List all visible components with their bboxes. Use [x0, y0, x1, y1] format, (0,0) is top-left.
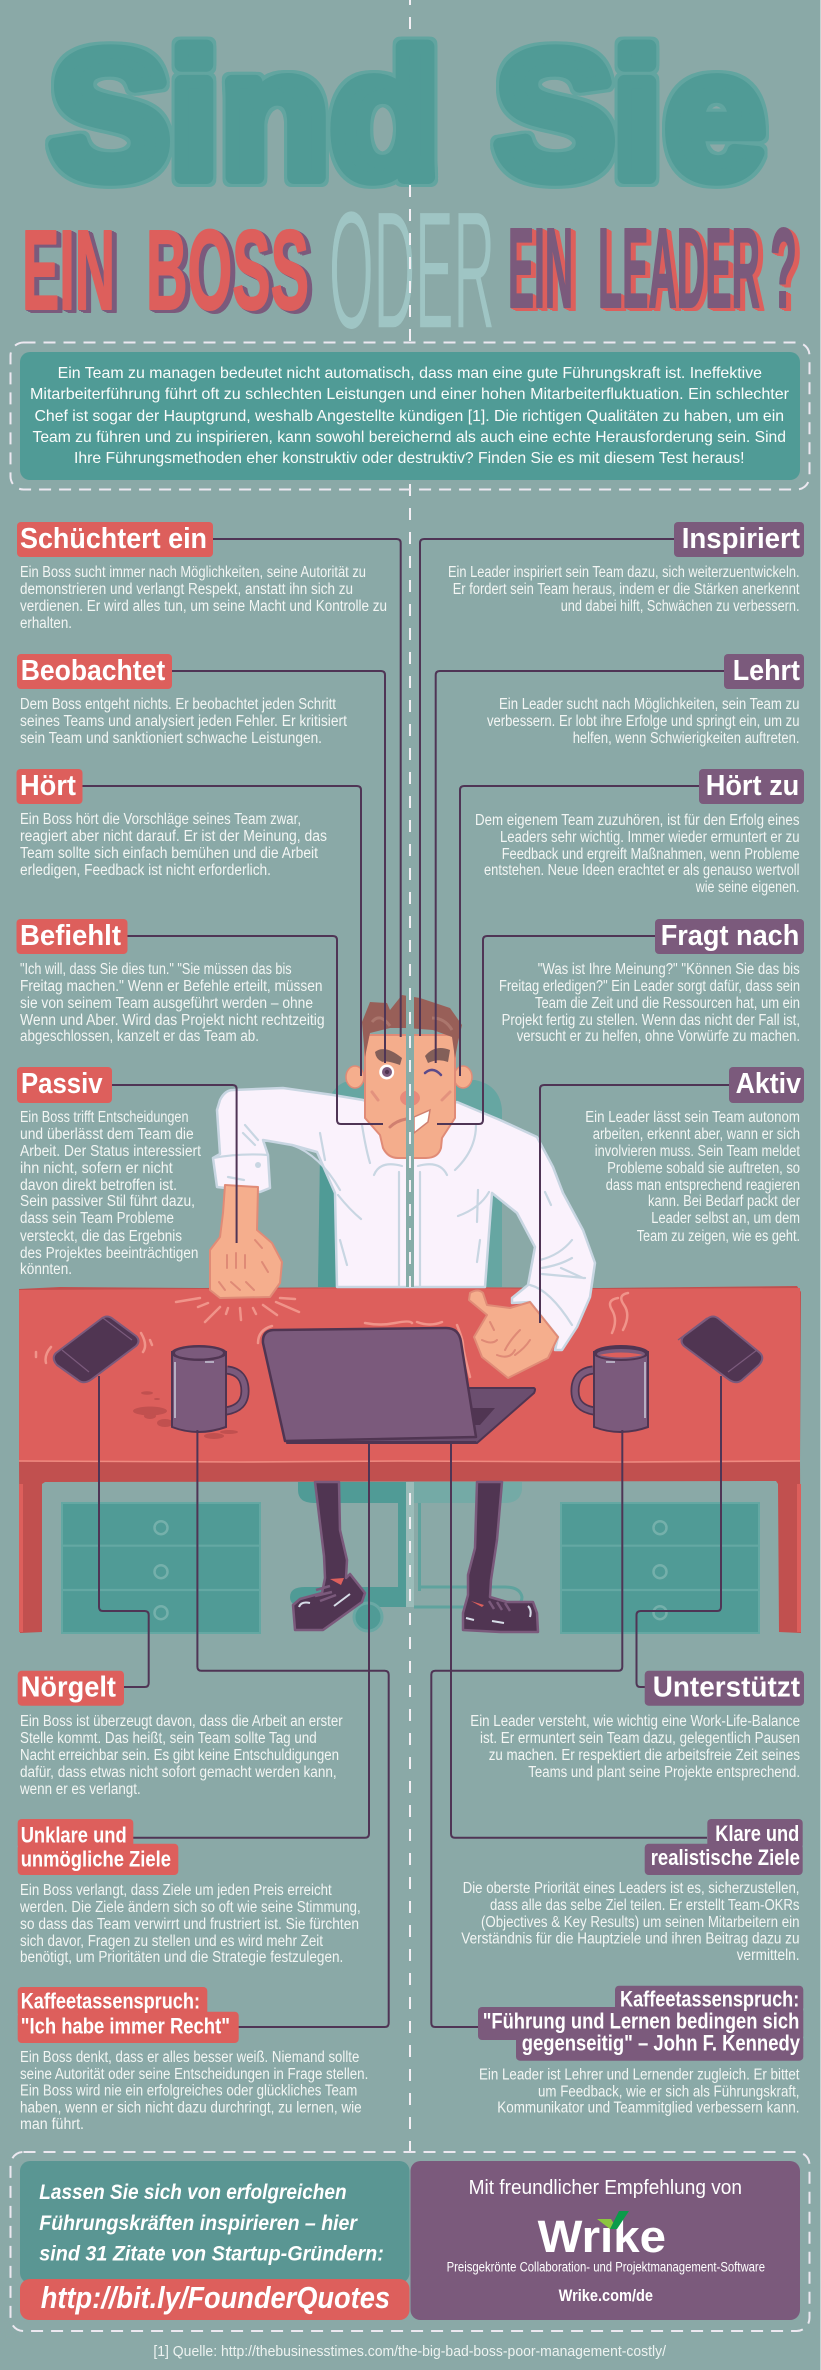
panel: intro: Ein Team zu managen bedeutet nicht automatisch, dass man eine gute Führungskraft ist. Ineffektive	[58, 365, 762, 382]
panel: Hört: erledigen, Feedback ist nicht erforderlich.	[20, 862, 271, 879]
illustration: left leg and shoe	[293, 1482, 365, 1630]
panel: Befiehlt	[16, 919, 325, 1045]
panel: intro: Chef ist sogar der Hauptgrund, weshalb Angestellte kündigen [1]. Die richtigen Qualitäten zu haben, um ein	[34, 408, 784, 425]
panel: Unklare und unmögliche Ziele: werden. Die Ziele ändern sich so oft wie seine Stimmung,	[19, 1899, 361, 1916]
panel: Unklare und unmögliche Ziele: unmögliche Ziele	[21, 1847, 171, 1872]
panel: Fragt nach	[499, 919, 804, 1045]
icon: laptop	[263, 1328, 535, 1443]
text: ODER	[329, 176, 495, 364]
panel: Befiehlt: "Ich will, dass Sie dies tun." "Sie müssen das bis	[20, 961, 292, 978]
panel: Schüchtert ein: verdienen. Er wird alles tun, um seine Macht und Kontrolle zu	[20, 598, 387, 615]
panel: Kaffeetassenspruch Boss: Ein Boss denkt, dass er alles besser weiß. Niemand sollte	[20, 2049, 359, 2066]
panel: quotes call to action: sind 31 Zitate von Startup-Gründern:	[39, 2243, 384, 2266]
illustration: coffee stains	[133, 1391, 238, 1439]
connector: Passiv	[112, 1085, 237, 1243]
panel: Lehrt	[487, 654, 804, 747]
panel: footer	[10, 2152, 810, 2331]
panel: Hört	[16, 769, 327, 879]
panel: intro: Team zu führen und zu inspirieren, kann sowohl bereichernd als auch eine echte Herausforderung sein. Sind	[32, 429, 786, 446]
panel: quotes call to action: Führungskräften inspirieren – hier	[39, 2212, 359, 2235]
panel: Beobachtet: seines Teams und analysiert jeden Fehler. Er kritisiert	[20, 713, 348, 730]
illustration: man right hand	[469, 1290, 558, 1378]
connector: Unterstützt	[636, 1376, 721, 1687]
panel: Schüchtert ein: Schüchtert ein	[20, 523, 207, 555]
panel: intro	[10, 342, 810, 490]
panel: Unklare und unmögliche Ziele: so dass das Team verwirrt und frustriert ist. Sie fürchten	[20, 1916, 359, 1933]
connector: Fragt nach	[437, 936, 655, 1124]
panel: Beobachtet: Beobachtet	[21, 655, 166, 687]
panel: Beobachtet: Dem Boss entgeht nichts. Er beobachtet jeden Schritt	[20, 696, 337, 713]
panel: Unterstützt	[470, 1671, 804, 1781]
panel: Wrike sponsor: Preisgekrönte Collaboration- und Projektmanagement-Software	[447, 2260, 765, 2275]
heading: ein Boss: EIN	[22, 207, 115, 333]
panel: Kaffeetassenspruch Boss: seine Autorität oder seine Entscheidungen in Frage stellen.	[20, 2066, 368, 2083]
panel: intro: Mitarbeiterführung führt oft zu schlechten Leistungen und einer hohen Mitarbeiterfluktuation. Ein schlechter	[30, 386, 790, 403]
connector: Inspiriert	[420, 539, 674, 1036]
panel: Passiv: versteckt, die das Ergebnis	[20, 1228, 182, 1245]
panel: Kaffeetassenspruch Boss: Kaffeetassenspruch:	[21, 1989, 200, 2014]
illustration: desk	[19, 1286, 801, 1633]
logo: Wrike: Wrike	[538, 2211, 666, 2262]
illustration: man shirt	[213, 1088, 595, 1350]
panel: Nörgelt: wenn er es verlangt.	[19, 1781, 141, 1798]
illustration: chair back	[318, 1080, 502, 1287]
connector: Kaffeetassenspruch Leader	[431, 1430, 622, 2027]
panel: Klare und realistische Ziele: vermitteln.	[737, 1947, 800, 1964]
source note: [1] Quelle: http://thebusinesstimes.com/the-big-bad-boss-poor-management-costly/	[153, 2343, 667, 2360]
panel: Beobachtet: sein Team und sanktioniert schwache Leistungen.	[20, 730, 322, 747]
illustration: chair base	[290, 1482, 522, 1631]
panel: Hört: Ein Boss hört die Vorschläge seines Team zwar,	[20, 811, 301, 828]
panel: intro: Ihre Führungsmethoden eher konstruktiv oder destruktiv? Finden Sie es mit diesem Test heraus!	[74, 450, 744, 467]
panel: Passiv: Ein Boss trifft Entscheidungen	[20, 1109, 188, 1126]
panel: Passiv: davon direkt betroffen ist.	[20, 1177, 177, 1194]
title: Sind Sie: Sind Sie	[0, 15, 765, 216]
connector: Befiehlt	[127, 936, 383, 1124]
panel: Unklare und unmögliche Ziele: sich davor, Fragen zu stellen und es wird mehr Zeit	[20, 1933, 324, 1950]
panel: Hört: reagiert aber nicht darauf. Er ist der Meinung, das	[20, 828, 327, 845]
panel: Nörgelt: dafür, dass etwas nicht sofort gemacht werden kann,	[20, 1764, 337, 1781]
panel: Unklare und unmögliche Ziele	[18, 1819, 361, 1966]
panel: Aktiv	[585, 1067, 804, 1245]
panel: Kaffeetassenspruch Boss	[18, 1987, 368, 2133]
panel: Befiehlt: abgeschlossen, kanzelt er das Team ab.	[20, 1028, 259, 1045]
panel: Kaffeetassenspruch Leader	[478, 1986, 803, 2116]
panel: Inspiriert: Inspiriert	[682, 523, 800, 555]
connector: Beobachtet	[172, 671, 385, 1063]
connector: Schüchtert ein	[213, 539, 401, 1037]
illustration: center strip	[406, 988, 414, 1287]
panel: Befiehlt: Befiehlt	[20, 920, 121, 952]
panel: Nörgelt: Ein Boss ist überzeugt davon, dass die Arbeit an erster	[20, 1713, 343, 1730]
panel: Passiv: Passiv	[21, 1068, 103, 1100]
panel: quotes call to action: Lassen Sie sich von erfolgreichen	[39, 2181, 347, 2204]
illustration: right drawers	[561, 1503, 759, 1633]
panel: Wrike sponsor	[410, 2161, 800, 2320]
panel: Hört: Team sollte sich einfach bemühen und die Arbeit	[20, 845, 319, 862]
panel: Schüchtert ein	[17, 522, 387, 632]
panel: Passiv: könnten.	[20, 1261, 72, 1278]
panel: Schüchtert ein: erhalten.	[20, 615, 72, 632]
panel: Kaffeetassenspruch Boss: "Ich habe immer Recht"	[21, 2013, 230, 2038]
panel: Schüchtert ein: Ein Boss sucht immer nach Möglichkeiten, seine Autorität zu	[20, 564, 366, 581]
connector: Nörgelt	[99, 1376, 149, 1687]
panel: Passiv: ihn nicht, sofern er nicht	[20, 1160, 173, 1177]
panel: Passiv: dass sein Team Probleme	[20, 1210, 174, 1227]
connector: Unklare Ziele	[133, 1443, 369, 1838]
panel: Hört zu: Hört zu	[706, 770, 799, 802]
panel: Passiv: Sein passiver Stil führt dazu,	[20, 1193, 195, 1210]
illustration: man left arm and fist	[210, 1185, 282, 1298]
illustration: shock lines	[36, 1293, 628, 1377]
icon: left phone	[54, 1316, 138, 1382]
panel: Inspiriert	[448, 522, 804, 615]
icon: right phone	[678, 1316, 762, 1382]
heading: ein Boss: BOSS	[146, 207, 309, 333]
panel: Fragt nach: Fragt nach	[661, 920, 799, 952]
connector: Hört	[82, 786, 361, 1076]
panel: Klare und realistische Ziele: Klare und	[715, 1821, 799, 1846]
panel: Nörgelt	[18, 1671, 343, 1798]
panel: Nörgelt: Nacht erreichbar sein. Es gibt keine Entschuldigungen	[20, 1747, 339, 1764]
panel: Klare und realistische Ziele	[461, 1819, 803, 1964]
panel: Unklare und unmögliche Ziele: Ein Boss verlangt, dass Ziele um jeden Preis erreicht	[20, 1882, 332, 1899]
connector: Lehrt	[436, 671, 724, 1063]
heading: ein Leader: EIN	[508, 205, 573, 331]
panel: Aktiv: Aktiv	[736, 1068, 801, 1100]
panel: Unterstützt: Unterstützt	[653, 1672, 800, 1704]
connector: Hört zu	[460, 786, 699, 1076]
connector: Kaffeetassenspruch Boss	[197, 1430, 389, 2027]
illustration: left drawers	[62, 1503, 260, 1633]
panel: Wrike sponsor: Mit freundlicher Empfehlung von	[469, 2177, 742, 2199]
panel: Kaffeetassenspruch Boss: man führt.	[20, 2116, 84, 2133]
illustration: right leg and shoe	[463, 1482, 538, 1632]
panel: Nörgelt: Stelle kommt. Das heißt, sein Team sollte Tag und	[20, 1730, 317, 1747]
panel: Befiehlt: Wenn und Aber. Wird das Projekt nicht rechtzeitig	[20, 1012, 325, 1029]
panel: Passiv: Arbeit. Der Status interessiert	[20, 1143, 202, 1160]
panel: Schüchtert ein: demonstrieren und verlangt Respekt, anstatt ihn sich zu	[20, 581, 353, 598]
illustration: man head	[346, 995, 472, 1158]
panel: Wrike sponsor: Wrike.com/de	[559, 2286, 653, 2305]
panel: Kaffeetassenspruch Boss: Ein Boss wird nie ein erfolgreiches oder glückliches Team	[20, 2082, 357, 2099]
panel: Unklare und unmögliche Ziele: Unklare und	[21, 1823, 127, 1848]
panel: Lehrt: Lehrt	[733, 655, 800, 687]
panel: Passiv	[17, 1067, 202, 1278]
icon: left mug	[171, 1345, 245, 1432]
panel: Befiehlt: Freitag machen." Wenn er Befehle erteilt, müssen	[20, 978, 322, 995]
panel: quotes call to action	[20, 2161, 410, 2320]
panel: Hört: Hört	[20, 770, 76, 802]
panel: Nörgelt: Nörgelt	[21, 1672, 116, 1704]
panel: Hört zu	[475, 769, 804, 896]
panel: Unklare und unmögliche Ziele: benötigt, um Prioritäten und die Strategie festzulegen.	[20, 1949, 343, 1966]
icon: right mug	[575, 1345, 649, 1432]
panel: quotes call to action: http://bit.ly/FounderQuotes	[41, 2280, 390, 2315]
panel: Passiv: und überlässt dem Team die	[20, 1126, 194, 1143]
panel: Befiehlt: sie von seinem Team ausgeführt werden – ohne	[20, 995, 313, 1012]
panel: Hört zu: wie seine eigenen.	[695, 879, 800, 896]
connector: Klare Ziele	[451, 1443, 707, 1838]
connector: Aktiv	[540, 1085, 729, 1323]
panel: Kaffeetassenspruch Boss: haben, wenn er sich nicht dazu durchringt, zu lernen, wie	[20, 2099, 362, 2116]
panel: Beobachtet	[17, 654, 348, 747]
panel: Passiv: des Projektes beeinträchtigen	[20, 1245, 198, 1262]
